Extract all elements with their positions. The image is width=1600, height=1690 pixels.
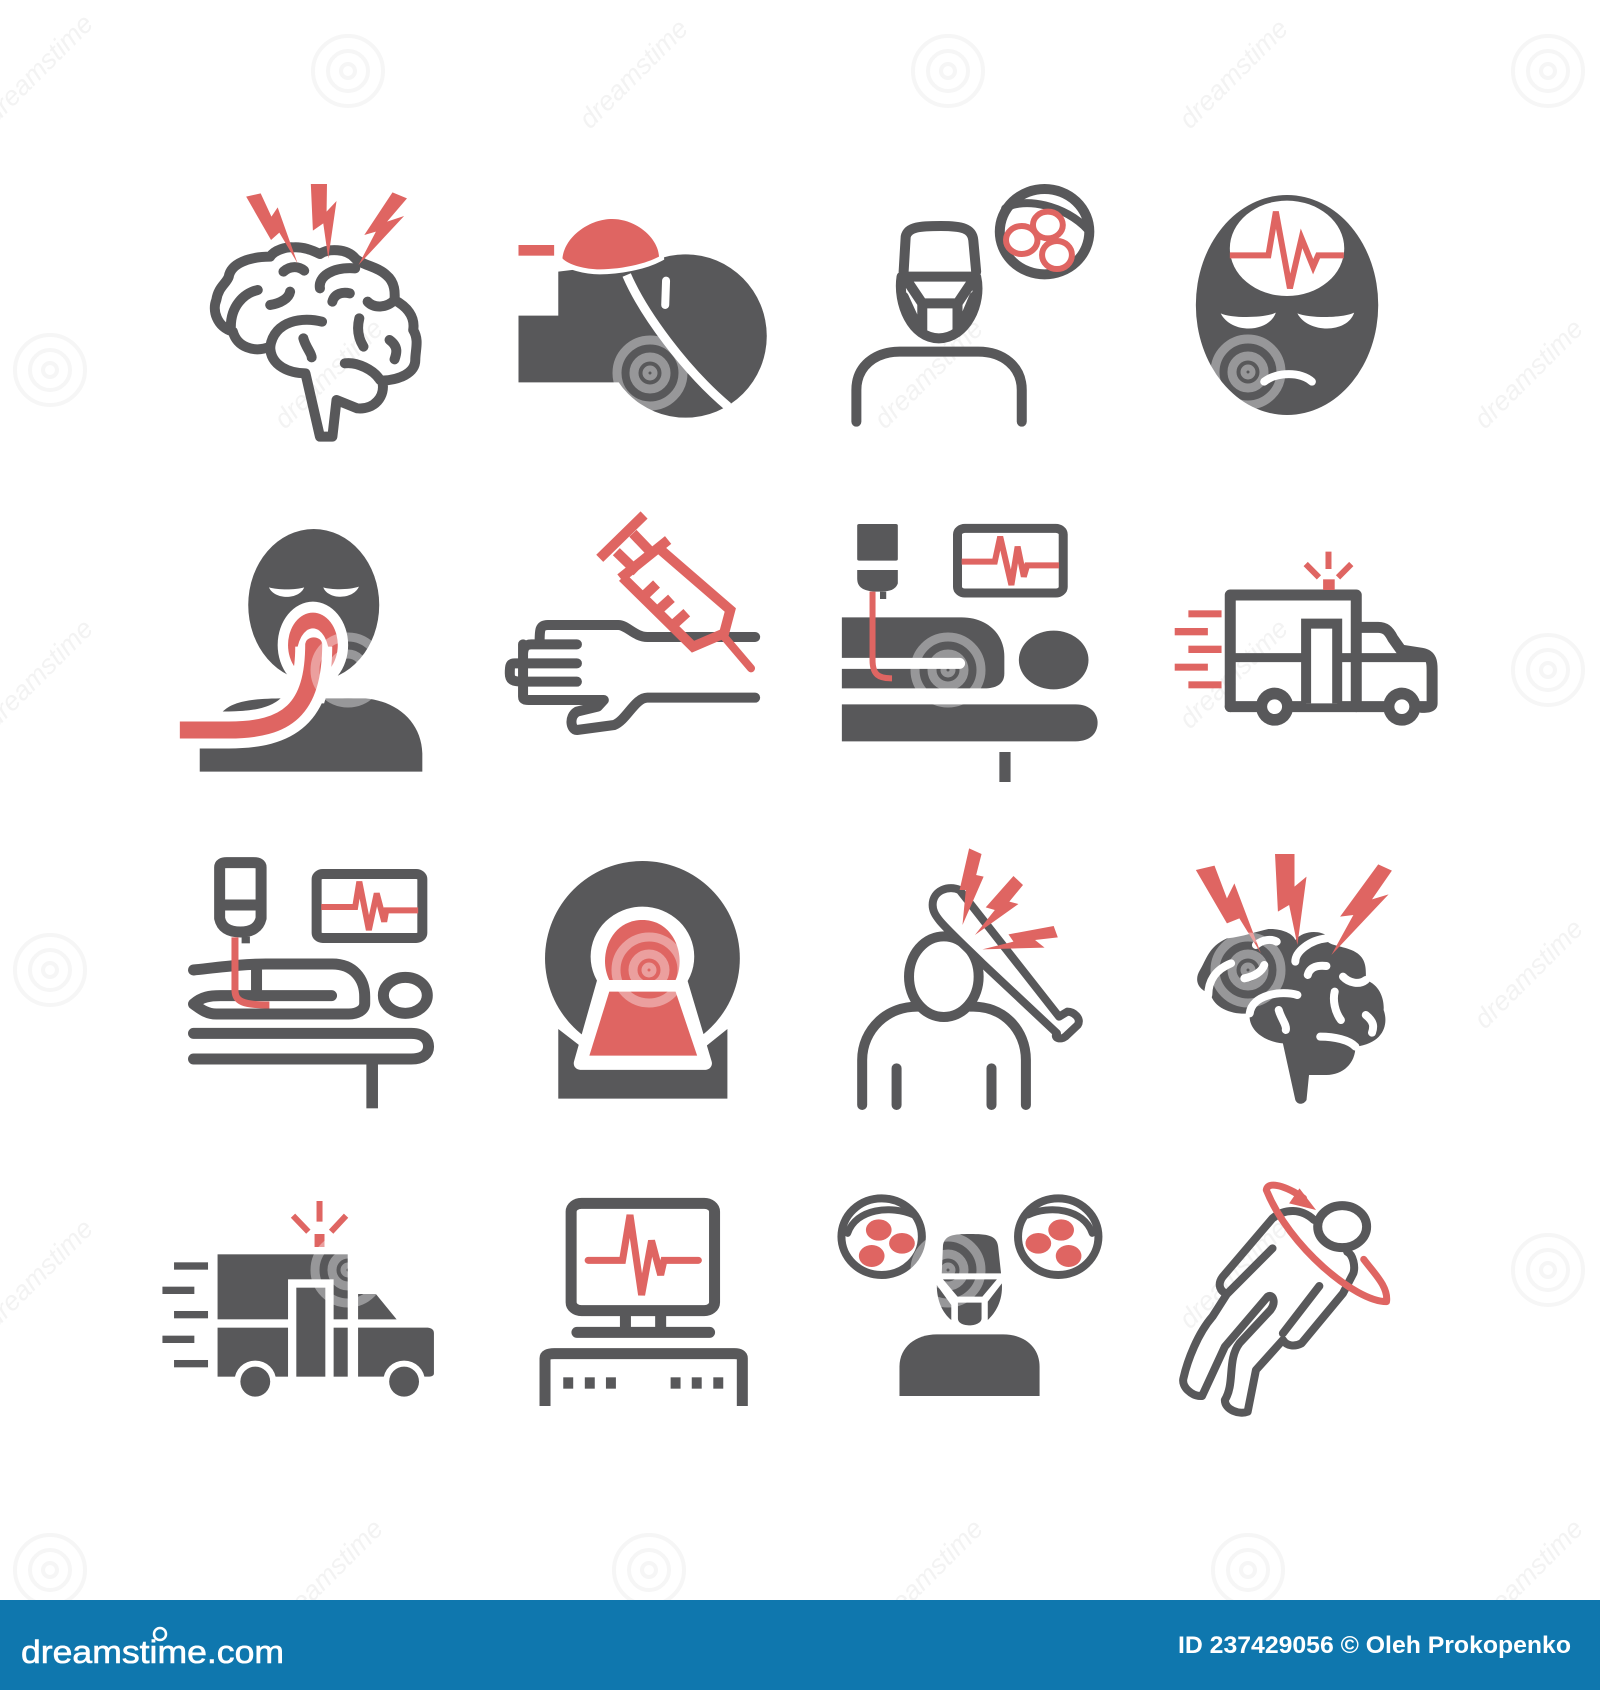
icon: patient with breathing tube [175, 529, 422, 772]
icon: head with dome [518, 219, 767, 418]
footer bar: dreamstime credit: dreamstime.com [21, 1634, 284, 1670]
icon: solid brain with lightning bolts [1196, 854, 1392, 1104]
icon: outlined ambulance with red speed lines [1175, 552, 1432, 726]
icon: brain with lightning bolts [215, 184, 417, 437]
text: dreamstime [868, 313, 989, 434]
icon: solid surgeon with two operating lamps [841, 1198, 1098, 1396]
icon: arm with syringe [510, 515, 755, 730]
footer bar: dreamstime credit [0, 1600, 1600, 1690]
icon: MRI scanner [545, 861, 740, 1099]
text: dreamstime [1468, 1513, 1589, 1634]
text: dreamstime [573, 13, 694, 134]
text: dreamstime [868, 1513, 989, 1634]
text: dreamstime [1173, 613, 1294, 734]
icon: person hit by baseball bat [862, 848, 1079, 1105]
icon: solid ambulance with speed lines [162, 1201, 434, 1401]
text: dreamstime [268, 1513, 389, 1634]
text: dreamstime [1468, 313, 1589, 434]
text: dreamstime [1468, 913, 1589, 1034]
icon: falling person with dizzy ring [1183, 1185, 1387, 1413]
footer bar: dreamstime credit: ID 237429056 © Oleh Prokopenko [1178, 1632, 1571, 1659]
icon: computer monitor with ECG on desk [545, 1203, 742, 1406]
icon: outlined patient with IV and monitor [194, 863, 429, 1108]
icon: solid patient with IV and monitor [842, 524, 1098, 782]
icon: surgeon outline with operating lamp [856, 189, 1089, 422]
text: dreamstime [1173, 1213, 1294, 1334]
text: dreamstime [268, 313, 389, 434]
text: dreamstime [1173, 13, 1294, 134]
icon: sad face with ECG on forehead [1196, 195, 1378, 415]
